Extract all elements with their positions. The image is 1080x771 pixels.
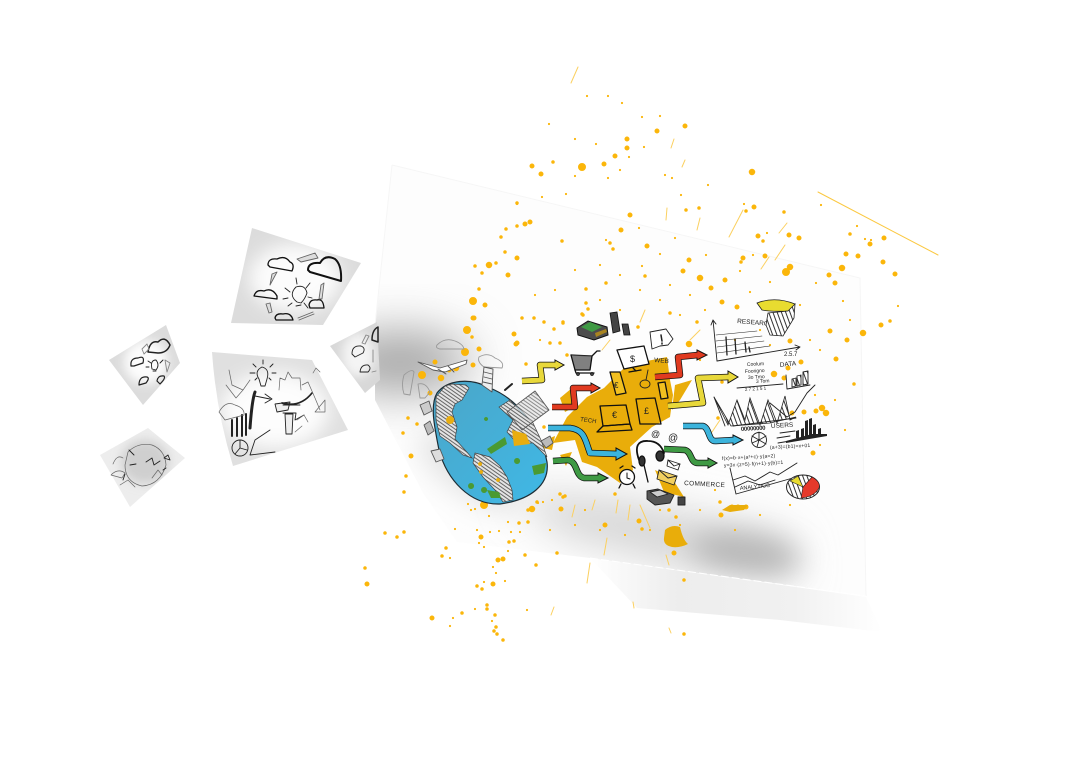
label: users [741, 422, 794, 433]
icon: alarm clock [619, 466, 635, 488]
chart: users bars [777, 418, 827, 443]
text: formula lines: (a+3)=(b1)=x+01 [770, 443, 811, 451]
text: data notes: 3 Tom [756, 378, 770, 385]
text: data notes [737, 360, 797, 392]
icon: phone small [658, 382, 668, 399]
land: africa and europe [499, 400, 547, 457]
panel: faint doodle sheet bottom left [100, 428, 185, 507]
icon: small radial chart [752, 432, 766, 448]
arrow: green to analytics [664, 449, 717, 468]
land: north america [436, 384, 472, 458]
arrow: green from globe [553, 460, 608, 483]
icon: phone euro [610, 372, 626, 395]
text: data notes: 3o Tmo [748, 374, 765, 381]
arrow: yellow to data [668, 371, 738, 406]
arrow: blue from globe [548, 428, 627, 460]
label: users: 00000000 [741, 426, 766, 433]
text: formula lines: y=3x·(z=5)·f(n+1)·y(b)=1 [724, 460, 784, 469]
text: data notes: Coolum [747, 361, 764, 368]
icon: monitor [617, 346, 649, 372]
icon: mouse [640, 370, 650, 388]
chart: analytics: ANALYTICS [740, 483, 771, 492]
panel: bulb strategy sheet [212, 352, 348, 466]
icon: phones dark [610, 312, 630, 335]
icon: envelopes [657, 460, 680, 485]
icon: tablet pound: £ [644, 406, 649, 416]
icon: money stack bottom [647, 489, 685, 505]
chart: hatched area line chart [714, 385, 815, 426]
label: users: USERS [771, 422, 794, 430]
panel: clouds and bulb sheet [231, 228, 361, 325]
arrow: yellow to shopping cart [522, 360, 564, 381]
text: formula lines [722, 443, 811, 469]
land: south america [473, 453, 513, 502]
paint on globe [468, 417, 546, 498]
chart: research line chart: 2.5.7 [784, 352, 798, 358]
icon: shopping cart [571, 351, 600, 375]
icon: speech bubble [650, 329, 673, 349]
chart: data bars [786, 371, 810, 389]
icon: money pile top [577, 321, 608, 340]
label: commerce: COMMERCE [684, 480, 726, 489]
arrow: blue to users [683, 426, 743, 445]
chart: analytics pie [786, 475, 820, 499]
panel: small clouds sheet left [109, 325, 180, 405]
icon: tablet pound [636, 398, 661, 424]
paint splatter [365, 96, 898, 640]
chart: research line chart: RESEARCH [737, 318, 774, 328]
chart: research line chart [711, 318, 800, 361]
arrow: red to research [655, 350, 707, 377]
text: data notes: 2 7 2 1 5 1 [745, 385, 767, 392]
icon: at signs [651, 429, 678, 444]
icon: at signs: @ [668, 433, 678, 444]
thin yellow streaks [551, 67, 938, 633]
yellow paint blob behind icons [543, 357, 748, 547]
icon: at signs: @ [651, 429, 660, 439]
icon: laptop euro [597, 405, 632, 432]
arrow: red to tech [552, 383, 600, 407]
panel: clipped clouds sheet right [330, 322, 380, 393]
chart: analytics [730, 463, 800, 494]
icon: laptop euro: € [612, 410, 617, 420]
text: data notes: Foorigno [745, 368, 765, 375]
text: formula lines: f(x)=b·x+(a²+c)·y(a=2) [722, 453, 776, 462]
label: web: WEB [654, 357, 669, 365]
label: tech: TECH [580, 417, 597, 425]
icon: headphones [637, 441, 664, 482]
panel: large sheet with soft shadows [375, 165, 866, 626]
chart: research pie [757, 300, 795, 336]
sketch buildings and plane around globe [402, 340, 553, 462]
icon: globe [402, 340, 553, 504]
icon: monitor: $ [630, 354, 635, 364]
icon: phone euro: € [614, 381, 619, 390]
text: data notes: DATA [779, 360, 797, 369]
